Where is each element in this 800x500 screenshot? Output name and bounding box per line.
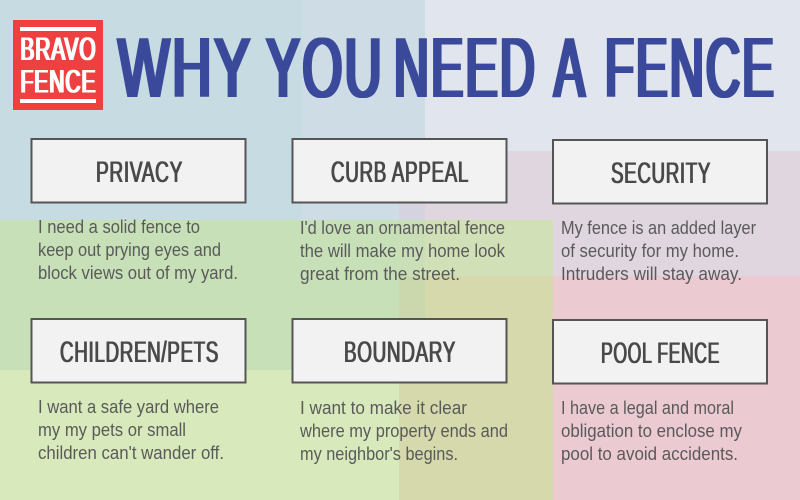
- logo: Bravo Fence: BRAVO: [20, 31, 96, 67]
- panel: boundary: where my property ends and: [299, 421, 508, 441]
- panel: security: My fence is an added layer: [561, 218, 756, 238]
- panel: curb appeal: the will make my home look: [300, 241, 506, 261]
- panel: privacy: I need a solid fence to: [38, 217, 200, 237]
- panel: children/pets: [32, 319, 246, 463]
- panel: boundary: [292, 319, 508, 464]
- panel: pool fence: [553, 320, 767, 464]
- panel: privacy: [32, 139, 246, 283]
- panel: privacy: block views out of my yard.: [38, 263, 238, 283]
- title: WHY: [118, 21, 253, 116]
- panel: children/pets: children can't wander off.: [38, 443, 224, 463]
- panel: curb appeal: great from the street.: [300, 264, 460, 284]
- panel: pool fence: obligation to enclose my: [561, 421, 742, 441]
- title: A: [554, 21, 587, 116]
- panel: pool fence: pool to avoid accidents.: [561, 444, 738, 464]
- panel: children/pets: CHILDREN/PETS: [60, 336, 219, 369]
- logo: Bravo Fence: [13, 20, 103, 110]
- panel: security: Intruders will stay away.: [561, 264, 742, 284]
- panel: boundary: my neighbor's begins.: [300, 444, 458, 464]
- panel: pool fence: POOL FENCE: [601, 337, 720, 370]
- panel: pool fence: I have a legal and moral: [561, 398, 734, 418]
- logo: Bravo Fence: FENCE: [20, 64, 96, 100]
- panel: security: [553, 140, 767, 284]
- panel: security: of security for my home.: [561, 241, 739, 261]
- title: [118, 21, 776, 116]
- panel: boundary: I want to make it clear: [300, 398, 467, 418]
- title: YOU: [266, 21, 384, 116]
- title: NEED: [394, 21, 537, 116]
- panel: boundary: BOUNDARY: [344, 336, 456, 369]
- panel: curb appeal: [292, 139, 506, 284]
- panel: curb appeal: I'd love an ornamental fence: [300, 218, 505, 238]
- panel: curb appeal: CURB APPEAL: [331, 156, 469, 189]
- panel: children/pets: my my pets or small: [38, 420, 186, 440]
- panel: privacy: keep out prying eyes and: [38, 240, 221, 260]
- panel: security: SECURITY: [611, 157, 711, 190]
- panel: children/pets: I want a safe yard where: [38, 397, 219, 417]
- panel: privacy: PRIVACY: [96, 156, 183, 189]
